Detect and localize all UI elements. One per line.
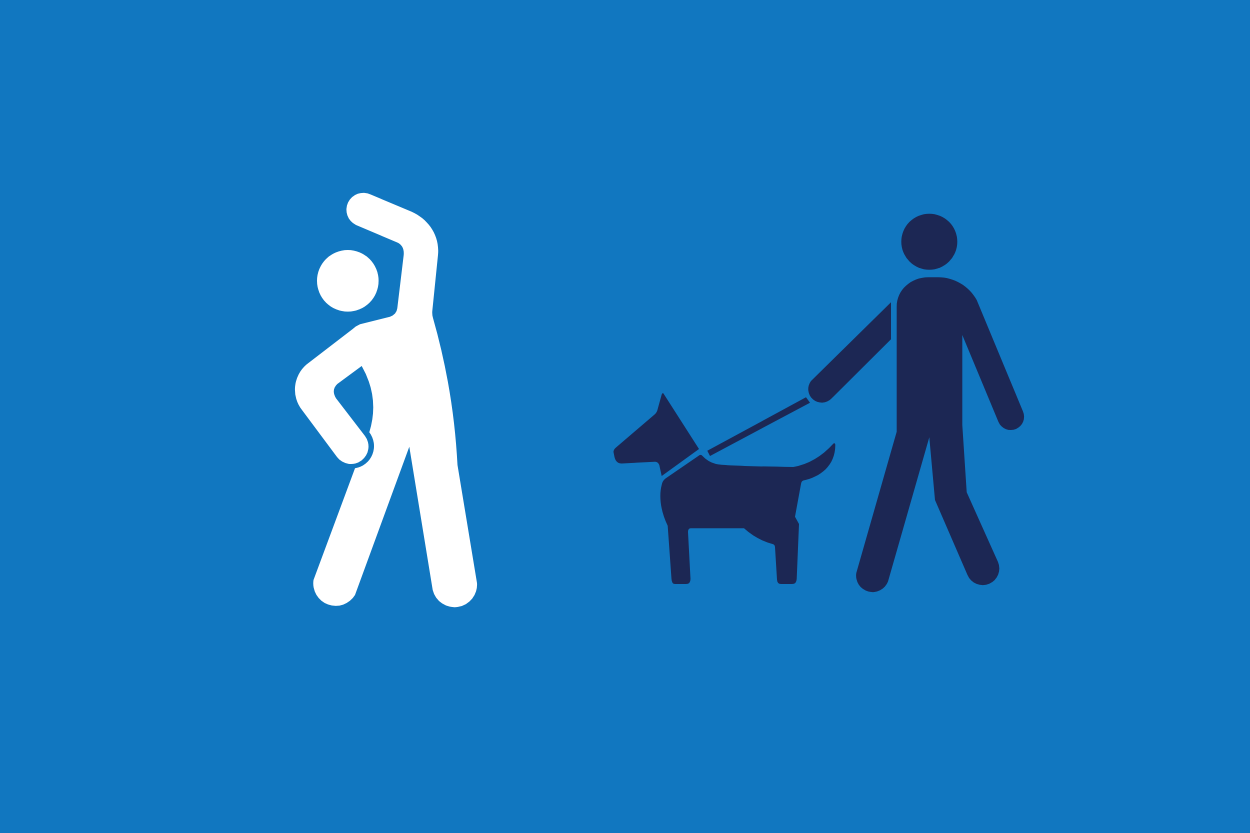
leash	[707, 397, 810, 456]
icon: stretching person	[295, 193, 477, 607]
dog body	[660, 443, 835, 584]
icon: person walking dog	[614, 214, 1024, 592]
person body	[856, 277, 1024, 592]
person arm	[808, 302, 891, 403]
dog head	[614, 393, 699, 476]
person head	[901, 214, 957, 270]
